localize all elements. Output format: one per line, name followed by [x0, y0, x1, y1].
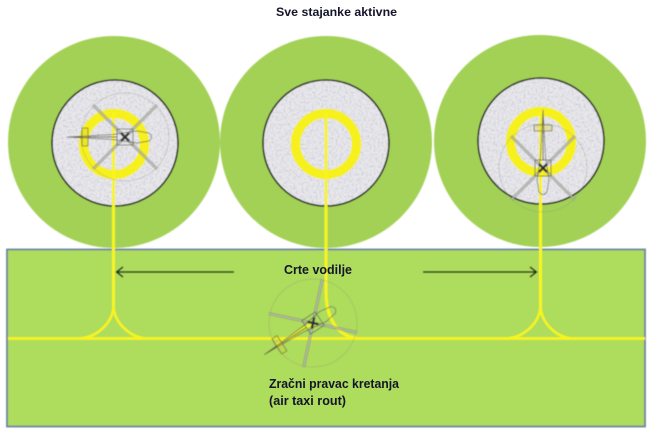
helicopter: right pad: [499, 110, 587, 212]
title: Sve stajanke aktivne: [276, 5, 397, 19]
pad circle: right: [434, 35, 646, 247]
label: air route: (air taxi rout): [269, 394, 346, 408]
arrow: left: [116, 267, 234, 277]
helicopter: on air taxi route: [240, 262, 374, 391]
helicopter: left pad: [67, 93, 169, 181]
taxiway panel: [7, 250, 645, 426]
label: guide lines: Crte vodilje: [284, 263, 352, 277]
pad circle: middle: [220, 36, 432, 248]
label: air route: [269, 377, 400, 408]
arrow: right: [423, 267, 536, 277]
pad circle: left: [8, 36, 220, 248]
label: air route: Zračni pravac kretanja: [269, 377, 400, 391]
yellow guide lines: [8, 112, 645, 345]
